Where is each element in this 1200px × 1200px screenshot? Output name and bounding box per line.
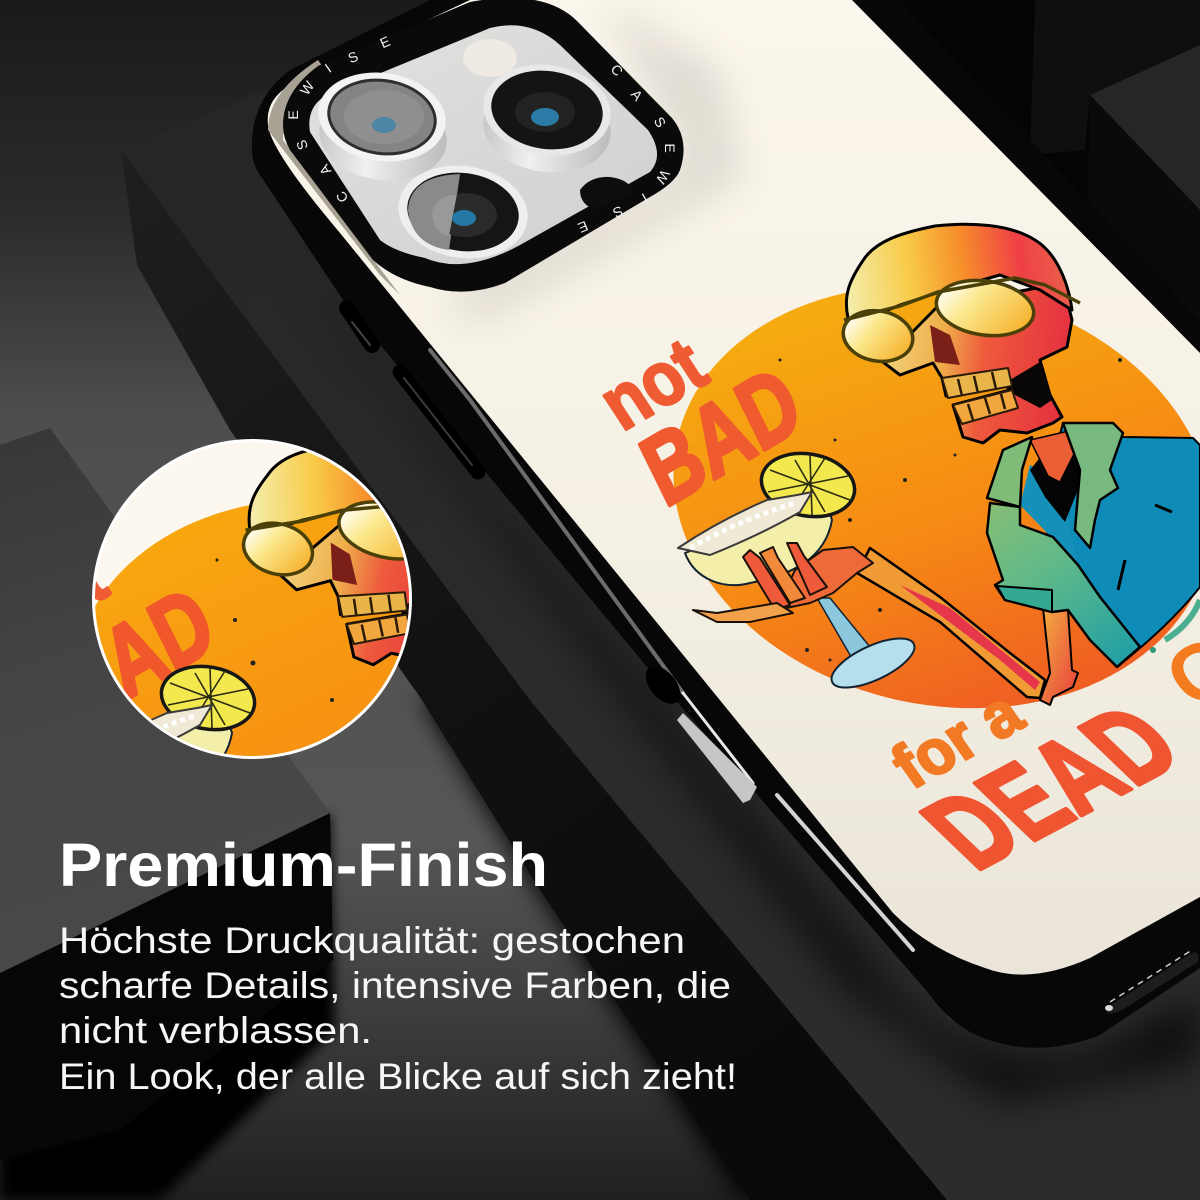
shirt body [1040, 423, 1200, 667]
sleeve and front [987, 503, 1140, 667]
ring lettering: I [639, 190, 651, 206]
text: for a DEAD: for a [879, 677, 1036, 802]
text: not BAD: BAD [625, 344, 817, 527]
body text: Höchste Druckqualität: gestochen [59, 920, 685, 961]
text: not BAD: not [585, 323, 721, 446]
collar right [1063, 423, 1123, 548]
ring lettering: E [662, 143, 678, 153]
ring lettering: S [611, 203, 625, 221]
flash [463, 39, 517, 77]
charging port [1105, 950, 1198, 1014]
lidar sensor [580, 177, 632, 210]
illustration: sun circle [673, 292, 1200, 708]
ring lettering: A [628, 86, 647, 104]
illustration: skull [839, 224, 1080, 443]
ring lettering: E [377, 33, 393, 51]
illustration: skeleton hand [693, 543, 873, 622]
ring lettering [285, 33, 678, 236]
ring lettering: S [293, 138, 311, 152]
forearm bone [857, 548, 1045, 698]
magnified detail circle [92, 439, 412, 759]
lens: right [477, 57, 617, 180]
magnified detail circle: BAD [38, 564, 230, 747]
neck vertebrae [1031, 431, 1073, 481]
side button: volume [400, 372, 478, 472]
ring lettering: C [608, 61, 626, 79]
shirt opening [1030, 456, 1079, 522]
illustration: shirt and arm [857, 423, 1200, 705]
illustration: margarita [678, 446, 921, 697]
hole above silver button [639, 660, 687, 710]
text: for a DEAD: DEAD [897, 684, 1200, 890]
printed case back [268, 0, 1200, 975]
body text: nicht verblassen. [59, 1010, 372, 1051]
edge highlights [430, 350, 913, 950]
ring lettering: S [651, 114, 669, 130]
ring lettering: A [315, 161, 334, 178]
body text: scharfe Details, intensive Farben, die [59, 965, 731, 1006]
ring lettering: I [322, 60, 334, 76]
collar left [987, 437, 1032, 507]
ring lettering: C [333, 188, 351, 206]
ring lettering: E [285, 110, 301, 120]
heading: Premium-Finish [59, 831, 548, 899]
body text [59, 920, 737, 1097]
ring lettering: W [652, 167, 673, 187]
ring lettering: W [297, 77, 318, 98]
ring lettering: E [576, 218, 590, 236]
phone case body [252, 0, 1200, 1100]
side button: silver [677, 713, 757, 803]
upper arm bone [1040, 608, 1078, 705]
side button: upper [347, 308, 372, 345]
camera island [283, 0, 684, 292]
ring lettering: S [345, 48, 361, 66]
body text: Ein Look, der alle Blicke auf sich zieht! [59, 1056, 737, 1097]
lens: left [312, 65, 453, 188]
lens: bottom [392, 157, 534, 267]
